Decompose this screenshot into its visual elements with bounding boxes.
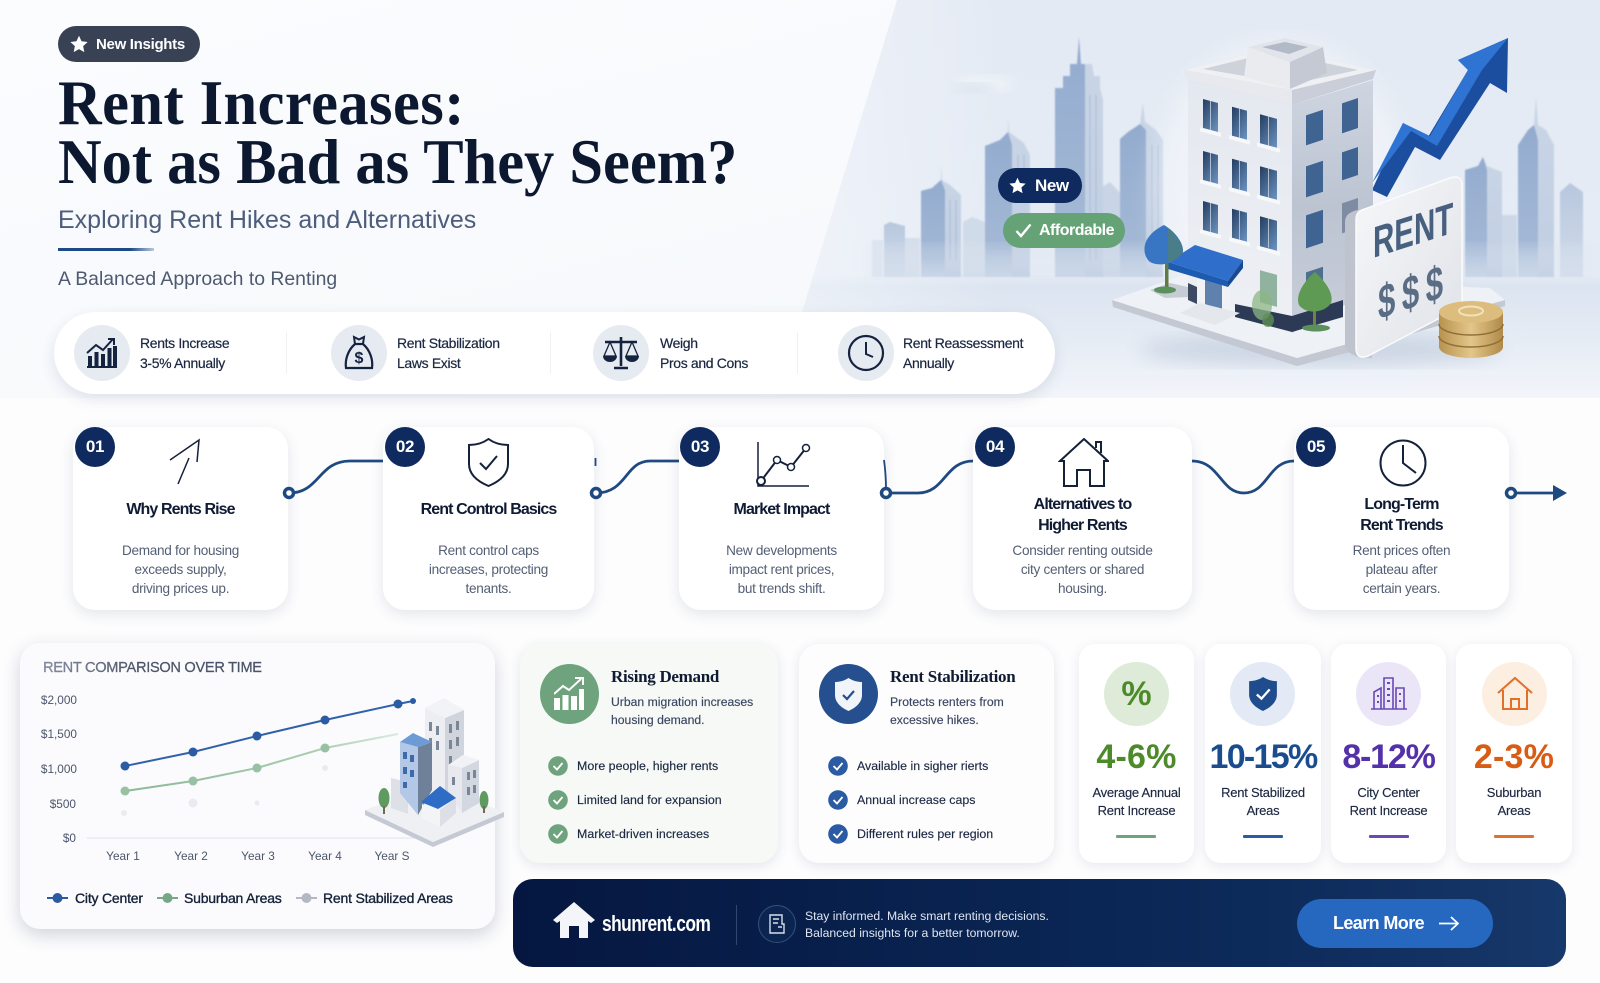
fact: rent reassessment: Rent Reassessment (903, 335, 1023, 351)
legend: suburban areas: Suburban Areas (184, 890, 282, 906)
item: Different rules per region (857, 827, 993, 841)
windows: right wall (1306, 98, 1358, 306)
icon: star (70, 36, 88, 52)
line chart (41, 693, 504, 863)
stat: rent stabilized areas (1205, 644, 1321, 863)
accent (1243, 835, 1283, 838)
item: Market-driven increases (577, 827, 709, 841)
icon: house (1482, 662, 1547, 726)
step 2 text (429, 543, 548, 596)
chart title: RENT COMPARISON OVER TIME (43, 660, 262, 676)
y axis labels: $2,000 (41, 693, 77, 707)
step 2 text: increases, protecting (429, 562, 548, 577)
item (548, 756, 718, 776)
item (828, 824, 993, 844)
step number 02: 02 (396, 437, 414, 456)
step number 05: 05 (1307, 437, 1325, 456)
tag: New (998, 168, 1082, 203)
step number 03 (680, 427, 720, 467)
step 4 text (1012, 543, 1153, 596)
legend: rent stabilized areas: Rent Stabilized Areas (323, 890, 453, 906)
banner message: Stay informed. Make smart renting decisions. (805, 909, 1049, 923)
y axis labels: $0 (63, 831, 76, 845)
x axis labels: Year 3 (241, 849, 275, 863)
accent (1116, 835, 1156, 838)
accent rule (58, 248, 154, 250)
title (58, 68, 737, 197)
step 5 heading: Long-Term (1364, 496, 1439, 513)
fact: rents increase: 3-5% Annually (140, 355, 225, 371)
icon: city (1356, 662, 1421, 726)
item (548, 790, 722, 810)
icon: house (1058, 438, 1109, 487)
icon: percent: % (1121, 675, 1152, 713)
step 2 text: Rent control caps (438, 543, 539, 558)
divider (736, 905, 737, 945)
description (890, 695, 1004, 727)
heading: Rent Stabilization (890, 667, 1015, 686)
x axis labels: Year 4 (308, 849, 342, 863)
step 2 heading: Rent Control Basics (421, 501, 556, 518)
step 5 heading (1360, 496, 1443, 534)
accent (1494, 835, 1534, 838)
step 3 text: impact rent prices, (729, 562, 834, 577)
fact: weigh pros and cons (593, 325, 748, 381)
title: Not as Bad as They Seem? (58, 127, 737, 197)
step 1 text: exceeds supply, (134, 562, 226, 577)
item: Limited land for expansion (577, 793, 722, 807)
step 4 text: city centers or shared (1021, 562, 1144, 577)
logo text: shunrent.com (602, 911, 710, 936)
trees (1144, 225, 1332, 332)
label: Rent Increase (1350, 803, 1427, 818)
tagline: A Balanced Approach to Renting (58, 268, 337, 290)
checklist (548, 756, 722, 844)
item (548, 824, 709, 844)
banner message: Balanced insights for a better tomorrow. (805, 926, 1020, 940)
series: suburban areas (120, 734, 398, 796)
icon: check (1016, 224, 1032, 238)
step 5 text: certain years. (1363, 581, 1440, 596)
illustration: apartment building with rising arrow, rent sign and coins (1012, 38, 1508, 370)
description: Protects renters from (890, 695, 1004, 709)
item: Annual increase caps (857, 793, 975, 807)
step number 01 (75, 427, 115, 467)
y axis labels: $1,500 (41, 727, 77, 741)
panel: Rising Demand (520, 644, 778, 863)
icon: percent (1104, 662, 1169, 726)
value: 4-6% (1096, 738, 1177, 776)
step 3 text: but trends shift. (738, 581, 825, 596)
label: Rent Stabilized (1221, 785, 1305, 800)
item (828, 756, 988, 776)
icon: line chart (756, 442, 810, 487)
badge: New Insights: New Insights (96, 36, 185, 53)
y axis labels: $1,000 (41, 762, 77, 776)
fact: weigh pros and cons: Pros and Cons (660, 355, 748, 371)
step number 04 (975, 427, 1015, 467)
logo icon: house (553, 901, 595, 939)
series: rent stabilized (121, 765, 328, 816)
icon: shield (1230, 662, 1295, 726)
icon: clock (838, 325, 894, 381)
icon: clock (1380, 440, 1426, 486)
RENT label: RENT (1373, 195, 1453, 268)
fact: rents increase: Rents Increase (140, 335, 229, 351)
fact: rent reassessment: Annually (903, 355, 954, 371)
step 1: Why Rents Rise (73, 427, 288, 610)
tag: New: New (1035, 176, 1069, 195)
illustration: misty city skyline (872, 38, 1584, 278)
building walls and roof (1184, 38, 1376, 333)
step 5 text: Rent prices often (1353, 543, 1450, 558)
item (828, 790, 976, 810)
step 4 text: Consider renting outside (1012, 543, 1153, 558)
item: More people, higher rents (577, 759, 718, 773)
label (1331, 784, 1446, 820)
value: 10-15% (1210, 738, 1316, 776)
label: Areas (1498, 803, 1530, 818)
connectors: step flow lines (282, 458, 1567, 501)
x axis labels: Year 1 (106, 849, 140, 863)
dollar signs: $$$ (1378, 252, 1450, 330)
plinth (1112, 275, 1505, 366)
icon: money bag: $ (355, 350, 364, 367)
button: Learn More: Learn More (1333, 913, 1424, 933)
badge: New Insights (58, 26, 200, 62)
label (1456, 784, 1572, 820)
icon: money bag (331, 325, 387, 381)
step 5: Long-Term Rent Trends (1294, 427, 1509, 610)
step 1 text: Demand for housing (122, 543, 239, 558)
dividers (286, 332, 287, 374)
rent sign (1345, 177, 1462, 358)
button: Learn More (1297, 899, 1493, 948)
banner message (805, 908, 1049, 942)
panel: Rent Stabilization (799, 644, 1054, 863)
step 4 heading: Higher Rents (1038, 517, 1127, 534)
fact: rent stabilization (331, 325, 500, 381)
y axis labels: $500 (50, 797, 76, 811)
entrance and awning (1168, 245, 1243, 325)
icon: star (1010, 178, 1026, 194)
stat: suburban areas (1456, 644, 1572, 863)
label (1092, 785, 1181, 818)
tag: Affordable: Affordable (1039, 222, 1114, 239)
step 4 text: housing. (1058, 581, 1107, 596)
step 1 text (122, 543, 239, 596)
panel: key facts bar (54, 312, 1055, 394)
step number 05 (1296, 427, 1336, 467)
step 4: Alternatives to Higher Rents (973, 427, 1192, 610)
label: City Center (1357, 785, 1420, 800)
description (611, 695, 753, 727)
ground shadow (1140, 334, 1500, 366)
icon: arrow (1439, 916, 1459, 931)
label: Rent Increase (1098, 803, 1175, 818)
x axis labels (106, 849, 410, 863)
value: 2-3% (1474, 738, 1554, 776)
label: Areas (1247, 803, 1279, 818)
icon: shield check (468, 438, 509, 487)
step 2 text: tenants. (466, 581, 511, 596)
legend (47, 890, 453, 906)
step 2: Rent Control Basics (383, 427, 594, 610)
label: Suburban (1487, 785, 1541, 800)
checklist (828, 756, 993, 844)
step 3: Market Impact (679, 427, 884, 610)
step 5 heading: Rent Trends (1360, 517, 1443, 534)
mini city illustration (365, 698, 504, 847)
x axis labels: Year S (375, 849, 410, 863)
item: Available in sigher rierts (857, 759, 988, 773)
step 1 text: driving prices up. (132, 581, 229, 596)
step number 01: 01 (86, 437, 104, 456)
hero background (776, 0, 1600, 398)
icon: shield circle (819, 664, 878, 724)
accent (1369, 835, 1409, 838)
title: Rent Increases: (58, 68, 465, 138)
description: Urban migration increases (611, 695, 753, 709)
icon: document circle (758, 905, 796, 943)
fact: rent reassessment (838, 325, 1024, 381)
step 3 heading: Market Impact (734, 501, 829, 518)
legend: city center: City Center (75, 890, 143, 906)
label (1205, 784, 1321, 820)
step 4 heading: Alternatives to (1034, 496, 1131, 513)
step 4 heading (1034, 496, 1132, 534)
step 3 text: New developments (726, 543, 837, 558)
fact: rent stabilization: Rent Stabilization (397, 335, 500, 351)
icon: growth chart circle (540, 664, 599, 724)
value: 8-12% (1342, 738, 1435, 776)
fact: weigh pros and cons: Weigh (660, 335, 698, 351)
description: excessive hikes. (890, 713, 979, 727)
step 3 text (726, 543, 837, 596)
step 5 text: plateau after (1366, 562, 1437, 577)
label: Average Annual (1092, 785, 1181, 800)
legend: city center (47, 890, 143, 906)
stat: city center rent increase (1331, 644, 1446, 863)
rising arrow (1372, 38, 1508, 197)
heading: Rising Demand (611, 667, 719, 686)
subtitle: Exploring Rent Hikes and Alternatives (58, 206, 476, 234)
step number 04: 04 (986, 437, 1004, 456)
windows: left wall (1200, 98, 1280, 308)
banner: call to action (513, 879, 1566, 967)
panel: rent comparison chart (20, 643, 495, 929)
step number 03: 03 (691, 437, 709, 456)
icon: rising bars (74, 325, 130, 381)
step 1 heading: Why Rents Rise (126, 501, 235, 518)
step number 02 (385, 427, 425, 467)
step 5 text (1353, 543, 1450, 596)
fact: rents increase (74, 325, 230, 381)
icon: scales (593, 325, 649, 381)
description: housing demand. (611, 713, 705, 727)
x axis labels: Year 2 (174, 849, 208, 863)
icon: thin arrow (170, 438, 200, 484)
tag: Affordable (1003, 213, 1125, 248)
series: city center (120, 698, 416, 770)
stack of coins (1439, 301, 1503, 358)
stat: average annual rent increase (1079, 644, 1194, 863)
y axis labels (41, 693, 77, 845)
fact: rent stabilization: Laws Exist (397, 355, 460, 371)
